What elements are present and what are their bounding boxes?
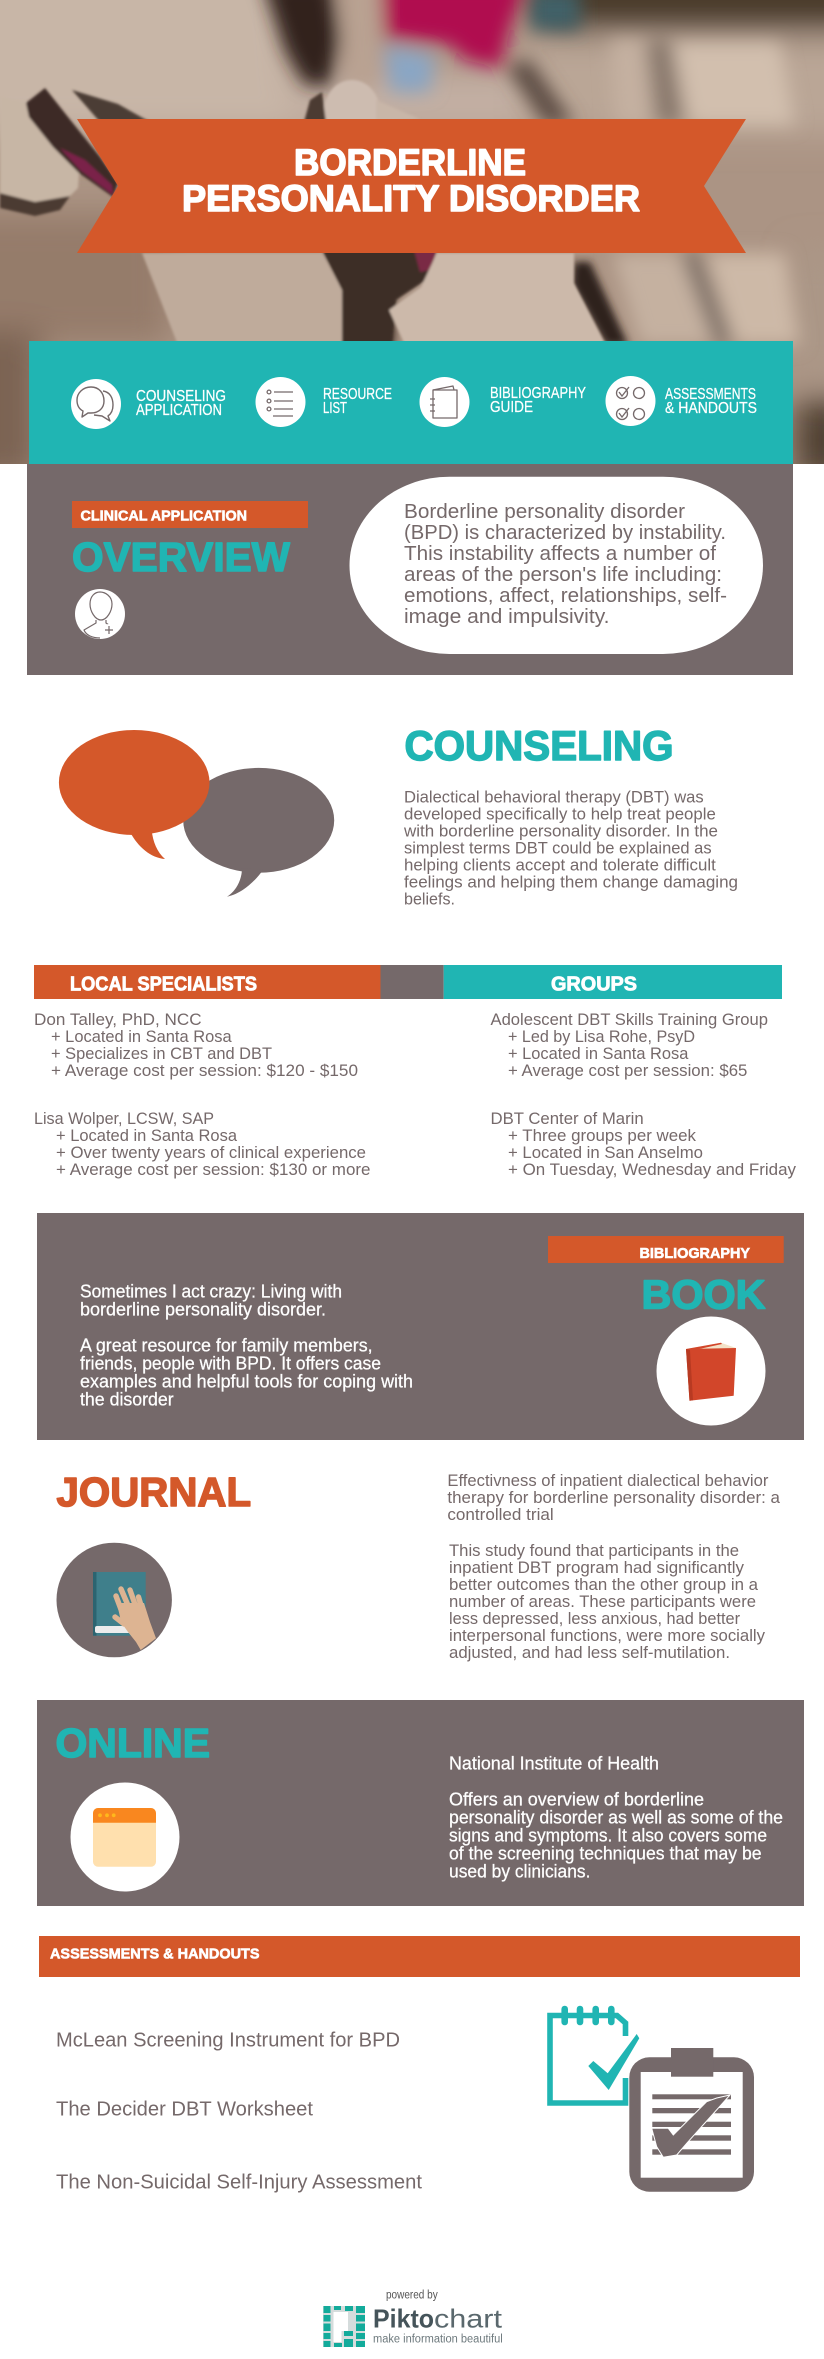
text: counseling description: simplest terms DBT could be explained as — [404, 838, 712, 857]
icon: clinician — [75, 589, 125, 639]
column header bar: local specialists and groups: LOCAL SPECIALISTS — [70, 974, 257, 996]
text: counseling description: developed specifically to help treat people — [404, 804, 716, 823]
wordmark: Pikto — [373, 2304, 434, 2334]
heading: online: ONLINE — [56, 1720, 210, 1766]
header photo: blurred puzzle pieces — [0, 0, 824, 480]
nav label: assessments and handouts — [665, 386, 757, 417]
text: book description: examples and helpful tools for coping with — [80, 1372, 413, 1392]
wordmark: make information beautiful — [373, 2334, 503, 2346]
title: BORDERLINE — [294, 142, 526, 183]
list: local specialists: Lisa Wolper, LCSW, SAP — [34, 1109, 214, 1128]
section tag — [72, 501, 308, 528]
text: journal article: This study found that participants in the — [449, 1541, 739, 1560]
text: online description: Offers an overview of borderline — [449, 1790, 704, 1810]
text: journal article: better outcomes than the other group in a — [449, 1575, 759, 1594]
wordmark — [373, 2304, 503, 2346]
list: groups: Adolescent DBT Skills Training Group — [490, 1010, 768, 1029]
nav label: assessments and handouts: ASSESSMENTS — [665, 386, 756, 403]
panel: clinical application overview — [27, 464, 793, 675]
section tag: bibliography — [548, 1236, 784, 1263]
text: book description: the disorder — [80, 1390, 174, 1410]
nav label: counseling application: APPLICATION — [136, 402, 222, 419]
text pill: definition of BPD: areas of the person's life including: — [404, 564, 722, 586]
nav label: resource list: RESOURCE — [323, 386, 392, 403]
text: book description: friends, people with BPD. It offers case — [80, 1354, 381, 1374]
icon: large speech bubbles — [59, 730, 334, 897]
text: counseling description: beliefs. — [404, 889, 455, 908]
list: local specialists — [34, 1010, 370, 1179]
text: online description — [449, 1754, 783, 1882]
text pill: definition of BPD: Borderline personality disorder — [404, 501, 685, 523]
section header: assessments and handouts — [39, 1936, 800, 1977]
text: online description: of the screening techniques that may be — [449, 1844, 762, 1864]
icon: browser window — [70, 1782, 180, 1892]
text: journal article: therapy for borderline personality disorder: a — [447, 1488, 781, 1507]
heading: journal: JOURNAL — [56, 1469, 251, 1515]
text: counseling description: Dialectical behavioral therapy (DBT) was — [404, 787, 704, 806]
text: online description: signs and symptoms. It also covers some — [449, 1826, 767, 1846]
list: local specialists: + Located in Santa Rosa — [51, 1027, 232, 1046]
nav label: assessments and handouts: & HANDOUTS — [665, 400, 757, 417]
panel: bibliography book — [37, 1213, 804, 1440]
column header bar: local specialists and groups — [34, 965, 782, 999]
heading: counseling: COUNSELING — [404, 722, 674, 769]
wordmark: chart — [434, 2304, 503, 2334]
text: journal article: inpatient DBT program had significantly — [449, 1558, 744, 1577]
text: online description: personality disorder as well as some of the — [449, 1808, 783, 1828]
text: journal article: controlled trial — [447, 1505, 554, 1524]
text: online description: used by clinicians. — [449, 1862, 590, 1882]
powered by piktochart logo: powered by — [386, 2289, 438, 2301]
text: journal article: less depressed, less anxious, had better — [449, 1609, 740, 1628]
section header: assessments and handouts: ASSESSMENTS & HANDOUTS — [50, 1947, 260, 1963]
panel: online resource — [37, 1700, 804, 1906]
text: book description: borderline personality disorder. — [80, 1300, 326, 1320]
text: book description: A great resource for family members, — [80, 1336, 373, 1356]
icon: notepad and check — [550, 2009, 639, 2103]
icon: list — [256, 377, 306, 427]
text: online description: National Institute of Health — [449, 1754, 659, 1774]
text pill: definition of BPD: emotions, affect, relationships, self- — [404, 585, 727, 607]
list: groups: + Located in San Anselmo — [508, 1143, 703, 1162]
column header bar: local specialists and groups: GROUPS — [551, 974, 637, 996]
nav label: counseling application — [136, 388, 226, 419]
title — [182, 142, 640, 219]
list: groups: + Located in Santa Rosa — [508, 1044, 689, 1063]
icon: checklist — [606, 376, 656, 426]
text: journal article: Effectivness of inpatient dialectical behavior — [447, 1471, 769, 1490]
nav label: resource list — [323, 386, 392, 417]
text pill: definition of BPD: image and impulsivity. — [404, 606, 610, 628]
list: assessments: McLean Screening Instrument for BPD — [56, 2029, 400, 2052]
heading: overview: OVERVIEW — [72, 534, 290, 580]
heading: book: BOOK — [642, 1272, 766, 1318]
list: local specialists: + Specializes in CBT and DBT — [51, 1044, 272, 1063]
text pill: definition of BPD — [350, 477, 763, 654]
list: assessments — [56, 2029, 422, 2194]
icon: clipboard — [629, 2048, 754, 2192]
powered by piktochart logo — [323, 2289, 503, 2347]
section tag: CLINICAL APPLICATION — [80, 509, 247, 525]
text: book description: Sometimes I act crazy: Living with — [80, 1282, 342, 1302]
list: groups — [490, 1010, 796, 1179]
text: journal article: number of areas. These participants were — [449, 1592, 756, 1611]
list: local specialists: Don Talley, PhD, NCC — [34, 1010, 202, 1029]
title ribbon banner — [77, 119, 746, 253]
list: local specialists: + Average cost per session: $130 or more — [56, 1160, 370, 1179]
text pill: definition of BPD: This instability affects a number of — [404, 543, 716, 565]
text: journal article: interpersonal functions, were more socially — [449, 1626, 765, 1645]
list: assessments: The Non-Suicidal Self-Injury Assessment — [56, 2171, 422, 2194]
nav label: bibliography guide — [490, 385, 586, 416]
text pill: definition of BPD: (BPD) is characterized by instability. — [404, 522, 726, 544]
list: assessments: The Decider DBT Worksheet — [56, 2098, 313, 2121]
icon: hand on teal book — [56, 1543, 172, 1657]
list: groups: + Led by Lisa Rohe, PsyD — [508, 1027, 695, 1046]
text: counseling description: feelings and helping them change damaging — [404, 872, 738, 891]
list: local specialists: + Over twenty years of clinical experience — [56, 1143, 366, 1162]
list: groups: + Three groups per week — [508, 1126, 696, 1145]
icon: red book — [656, 1316, 766, 1426]
text: journal article — [447, 1471, 781, 1662]
nav label: resource list: LIST — [323, 400, 347, 417]
list: groups: DBT Center of Marin — [490, 1109, 644, 1128]
icon: piktochart mark — [323, 2306, 365, 2347]
icon: speech bubbles — [71, 379, 121, 429]
icon: notebook — [420, 377, 470, 427]
nav label: bibliography guide: GUIDE — [490, 399, 533, 416]
text: book description — [80, 1282, 413, 1410]
nav label: counseling application: COUNSELING — [136, 388, 226, 405]
text: journal article: adjusted, and had less self-mutilation. — [449, 1643, 730, 1662]
text: counseling description — [403, 787, 738, 908]
title: PERSONALITY DISORDER — [182, 178, 640, 219]
nav label: bibliography guide: BIBLIOGRAPHY — [490, 385, 586, 402]
panel: navigation bar — [29, 341, 793, 464]
list: local specialists: + Average cost per session: $120 - $150 — [51, 1061, 358, 1080]
text: counseling description: with borderline personality disorder. In the — [403, 821, 718, 840]
list: groups: + Average cost per session: $65 — [508, 1061, 747, 1080]
list: groups: + On Tuesday, Wednesday and Friday — [508, 1160, 796, 1179]
text: counseling description: helping clients accept and tolerate difficult — [404, 855, 716, 874]
list: local specialists: + Located in Santa Rosa — [56, 1126, 238, 1145]
section tag: bibliography: BIBLIOGRAPHY — [640, 1246, 750, 1262]
